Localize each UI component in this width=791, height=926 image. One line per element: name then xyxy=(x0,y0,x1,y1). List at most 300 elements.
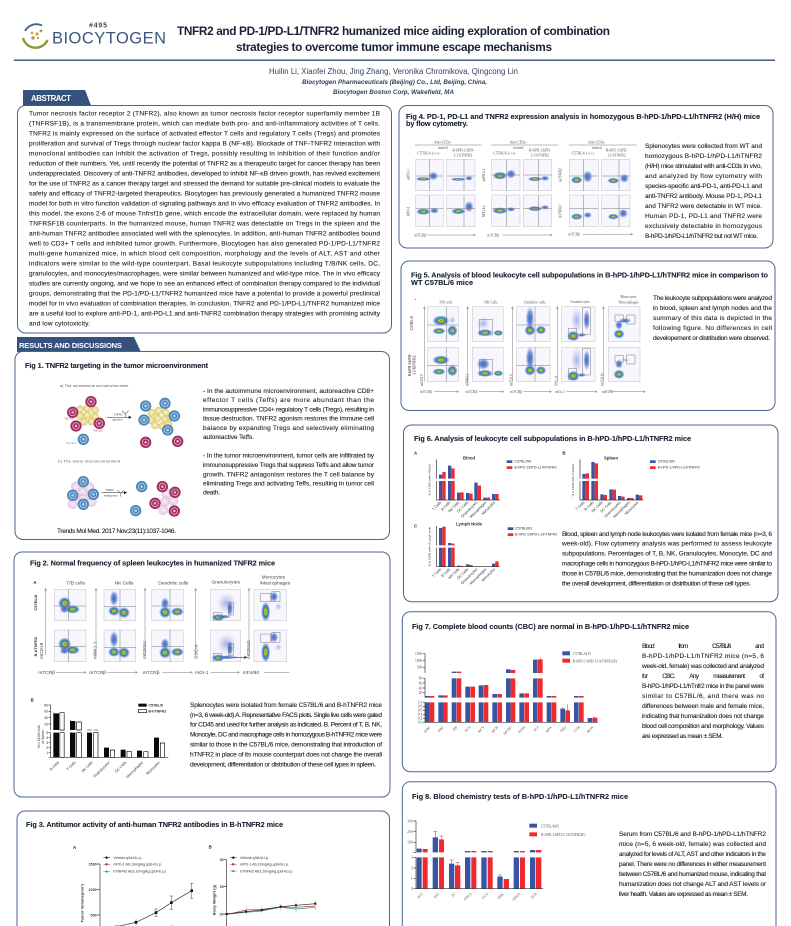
text block: Fig 1 description: immunosuppressive CD4+ regulatory T cells (Tregs), resulting in xyxy=(203,406,374,413)
flow cytometry plots A: SSC-A xyxy=(193,643,199,659)
bar chart C: lymph node: DC Cells xyxy=(456,567,469,580)
bar chart: complete blood counts: B-hPD-1/hPD-L1/hTNFR2(F) xyxy=(573,659,618,663)
bar chart: complete blood counts: MON xyxy=(586,725,595,734)
text block: Fig 6 description: macrophage cells in homozygous B-hPD-1/hPD-L1/hTNFR2 mice were similar to xyxy=(562,561,772,568)
panel: abstract: reduction of their numbers. Yet, until recently the potential of TNFR2 as a therapeutic target for cancer therapy has been xyxy=(29,160,380,168)
bar chart: complete blood counts: PLT xyxy=(533,725,541,732)
bar chart B: spleen: C57BL/6N xyxy=(658,460,675,464)
bar chart A: blood: B Cells xyxy=(440,500,451,512)
flow cytometry plots: SSC-A xyxy=(554,375,558,386)
line chart B: body weight: mPD-1 Ab,10mg/kg,q3d×6,i.p. xyxy=(240,863,289,867)
bar chart: blood chemistry: TBIL xyxy=(496,891,506,900)
text block: Fig 6 description: those in C57BL/6 mice, demonstrating that the humanization does not change xyxy=(562,571,772,578)
flow cytometry plots: Granulocytes xyxy=(570,300,590,304)
flow cytometry plots: T/B cells xyxy=(439,301,453,305)
bar chart A: blood: B-hPD-1/hPD-L1/hTNFR2 xyxy=(514,466,557,470)
flow cytometry plots: mTCRβ xyxy=(568,233,580,237)
flow cytometry plots: treated xyxy=(592,146,602,150)
text block: Fig 2 description: for CD45 and used for further analysis as indicated. B. Percent of T, B, NK, xyxy=(190,721,382,728)
flow cytometry plots A: /Macrophages xyxy=(260,580,291,586)
bar chart: complete blood counts: 0.6 xyxy=(418,709,422,713)
bar chart: blood chemistry: ALB xyxy=(530,891,538,900)
bar chart A: blood: C57BL/6N xyxy=(514,460,532,464)
bar chart C: lymph node xyxy=(414,522,557,586)
icon: Biocytogen logo xyxy=(23,24,166,48)
panel: abstract: (TNFRSF1B), is a transmembrane protein, which can mediate both pro- and anti-inflammatory activities of T cells. xyxy=(29,120,380,128)
bar chart C: lymph node: B Cells xyxy=(440,567,451,578)
bar chart B: spleen xyxy=(562,450,700,519)
bar chart C: lymph node: Monocytes xyxy=(481,567,496,583)
flow cytometry plots: C57BL/6 (+/+) xyxy=(572,151,594,155)
authors and affiliations xyxy=(269,67,518,96)
flow cytometry plots: Anti-CD3ε- xyxy=(510,141,528,145)
bar chart: blood chemistry: TC xyxy=(451,891,457,898)
panel: abstract: groups, demonstrating that the PD-1/PD-L1/TNFR2 humanized mice have a potential to provide a powerful preclinical xyxy=(29,290,381,298)
flow cytometry plots: mTCRβ xyxy=(510,390,522,394)
panel: abstract: model for in vivo evaluation of combination therapies. In conclusion, TNFR2 and PD-1/PD-L1/TNFR2 humanized mice xyxy=(29,300,380,308)
title xyxy=(177,24,610,54)
text block: Fig 1 description: immunosuppressive Tregs that suppress Teffs and allow tumor xyxy=(203,462,375,469)
line chart A: tumor volume: Tumor Volume(mm³) xyxy=(79,883,84,923)
flow cytometry plots: B-hPD-1/hPD- xyxy=(606,148,628,152)
text block: Fig 1 description xyxy=(203,388,375,497)
bar chart A: blood: % in CD45 cells of Blood xyxy=(428,464,432,496)
panel: Fig 7 xyxy=(402,612,776,772)
flow cytometry plots A: Dendritic cells xyxy=(158,580,189,586)
flow cytometry plots: mTCRβ xyxy=(414,233,426,237)
bar chart: blood chemistry: UREA xyxy=(512,892,522,902)
bar chart C: lymph node: NK Cells xyxy=(447,567,460,580)
flow cytometry plots A: mF4/80 xyxy=(243,670,259,676)
bar chart: complete blood counts: 1500 xyxy=(415,652,423,656)
text block: Fig 4 description: homozygous B-hPD-1/hPD-L1/hTNFR2 xyxy=(645,153,762,160)
bar chart: blood chemistry xyxy=(407,819,586,902)
line chart B: body weight: 20 xyxy=(220,912,224,916)
flow cytometry plots: Anti-CD3ε- xyxy=(588,141,606,145)
title: TNFR2 and PD-1/PD-L1/TNFR2 humanized mice aiding exploration of combination xyxy=(177,24,610,38)
bar chart B: Monocytes xyxy=(145,760,161,776)
flow cytometry plots: mPD-L1 xyxy=(482,168,486,181)
line chart A: tumor volume: mPD-1 Ab,10mg/kg,q3d×6,i.p. xyxy=(113,863,162,867)
bar chart: complete blood counts: 80 xyxy=(419,677,423,681)
flow cytometry plots: mF4/80 xyxy=(602,390,614,394)
bar chart B: spleen: DC Cells xyxy=(600,500,613,514)
text block: Fig 2 description: development, differentiation or distribution of these cell types in spleen. xyxy=(190,762,376,769)
panel: abstract: monoclonal antibodies can inhibit the activation of Tregs, possibly resulting in inhibition of their function and/or xyxy=(29,150,381,158)
text block: Fig 5 description: summary of this data is depicted in the xyxy=(653,315,772,322)
text block: Fig 1 description: tissue destruction. TNFR2 agonism restores the immune cell xyxy=(203,416,375,423)
panel: Fig 5: WT C57BL/6 mice xyxy=(411,278,473,287)
diagram: autoimmune and tumor microenvironments: TNFR2 xyxy=(105,488,114,492)
flow cytometry plots: /Macrophages xyxy=(618,301,639,305)
text block: Fig 5 description: following figure. No differences in cell xyxy=(653,325,773,332)
bar chart: complete blood counts: 1000 xyxy=(415,659,423,663)
panel: Fig 3: Fig 3. Antitumor activity of anti-human TNFR2 antibodies in B-hTNFR2 mice xyxy=(26,820,283,829)
text block: Fig 1 description: balance by expanding Tregs and selectively eliminating xyxy=(203,425,374,432)
text block: Fig 4 description: (H/H) mice stimulated with anti-CD3ε in vivo, xyxy=(645,163,762,170)
bar chart B: B xyxy=(31,698,34,703)
flow cytometry plots A xyxy=(33,574,291,676)
text block: Fig 6 description: subpopulations. Percentages of T, B, NK, Granulocytes, Monocyte, DC and xyxy=(562,551,772,558)
bar chart: complete blood counts: 1.0 xyxy=(418,701,422,705)
line chart A: tumor volume: 1500 xyxy=(89,862,97,866)
bar chart B xyxy=(31,698,168,779)
bar chart: blood chemistry: 0 xyxy=(411,887,413,891)
bar chart B: 20 xyxy=(44,722,48,726)
bar chart B: 2 xyxy=(46,746,48,750)
panel: Fig 1: Fig 1. TNFR2 targeting in the tumor microenvironment xyxy=(25,361,209,370)
diagram: autoimmune and tumor microenvironments: TNFR2 xyxy=(114,413,123,417)
panel: abstract: this model, the exons 2-6 of mouse Tnfrsf1b gene, which encode the extracellular domain, were replaced by human xyxy=(29,210,380,218)
diagram: autoimmune and tumor microenvironments: Treg CD4 xyxy=(66,442,76,445)
bar chart B: Macrophages xyxy=(126,760,144,779)
text block: Fig 2 description: hTNFR2 in place of its mouse counterpart does not change the overall xyxy=(190,752,383,759)
panel: abstract: model for both in vitro function validation of signaling pathways and in vivo efficacy evaluation of TNFR2 antibodies. In xyxy=(29,200,380,208)
flow cytometry plots: treated xyxy=(513,146,523,150)
bar chart: complete blood counts: MCV xyxy=(477,725,486,734)
flow cytometry plots: hTNFR2 xyxy=(558,204,562,218)
bar chart: complete blood counts: 0.2 xyxy=(418,717,422,721)
bar chart B: T Cells xyxy=(66,760,77,771)
diagram: autoimmune and tumor microenvironments: Teff CD8 xyxy=(93,430,103,432)
text block: Fig 7 description: blood cell composition and morphology. Values xyxy=(642,723,765,730)
text block: Fig 1 description: eliminating Tregs and activating Teffs, resulting in tumor cell xyxy=(203,481,375,488)
text block: Fig 7 description: similar to C57BL/6, and there was no xyxy=(642,693,764,700)
text block: Fig 5 description: developement or distribution were observed. xyxy=(653,335,770,342)
text block: Fig 7 description: for CBC. Any measurement of xyxy=(642,673,764,680)
bar chart: complete blood counts: RDW xyxy=(518,725,527,734)
flow cytometry plots A: A xyxy=(33,580,37,585)
diagram: autoimmune and tumor microenvironments xyxy=(58,384,183,517)
line chart B: body weight xyxy=(209,844,316,926)
poster number: #495 xyxy=(89,22,107,30)
text block: Fig 6 description xyxy=(561,531,772,588)
bar chart A: blood: DC Cells xyxy=(456,500,469,514)
panel: Fig 2 xyxy=(14,552,390,797)
line chart B: body weight: 30 xyxy=(220,858,224,862)
text block: Fig 4 description: Human PD-1, PD-L1 and TNFR2 were xyxy=(645,213,762,220)
flow cytometry plots A: mCD11c xyxy=(142,640,148,659)
panel: abstract: for the use of TNFR2 as a cancer therapy target and stressed the demand for suitable pre-clinical models to evaluate the xyxy=(29,180,380,188)
flow cytometry plots: hPD-1 xyxy=(407,206,411,216)
bar chart: complete blood counts: 0.0 xyxy=(418,721,422,725)
bar chart B: spleen: Macrophages xyxy=(612,500,631,519)
line chart B: body weight: hTNFR2 Ab3,10mg/kg,q3d×6,i.p. xyxy=(240,869,293,873)
bar chart: complete blood counts: MPV xyxy=(545,725,554,734)
flow cytometry plots xyxy=(408,295,645,394)
line chart B: body weight: Body Weight (g) xyxy=(212,884,217,915)
bar chart C: lymph node: Lymph Node xyxy=(456,522,483,527)
flow cytometry plots A: mCD19 xyxy=(39,642,45,659)
bar chart B: 3 xyxy=(46,741,48,745)
panel: abstract: TNFRSF1B counterparts. In the humanized mouse, human TNFR2 was detectable on Tregs in the spleen and the xyxy=(29,220,380,228)
bar chart: complete blood counts: 20 xyxy=(419,691,423,695)
bar chart: complete blood counts: 500 xyxy=(417,666,423,670)
text block: Fig 7 description: B-hPD-1/hPD-L1/hTNFR2 mice (n=5, 6 xyxy=(642,653,764,660)
panel: Fig 2: Fig 2. Normal frequency of spleen leukocytes in humanized TNFR2 mice xyxy=(30,559,275,568)
bar chart: blood chemistry: 1 xyxy=(411,877,413,881)
text block: Fig 1 description: - In the tumor microenvironment, tumor cells are infiltrated by xyxy=(203,453,375,460)
bar chart A: blood: Granulocytes xyxy=(460,500,478,519)
flow cytometry plots A: Granulocytes xyxy=(211,579,240,585)
panel: abstract: safety and efficacy of TNFR2-targeted therapeutics. Biocytogen has previously generated a humanized TNFR2 mouse xyxy=(29,190,380,198)
flow cytometry plots A: mTCRβ xyxy=(89,670,106,676)
text block: Fig 8 description: between C57BL/6 and humanized mouse, indicating that xyxy=(619,871,766,878)
text block: Fig 4 description: and TNFR2 were detectable in WT mice. xyxy=(645,203,762,210)
bar chart B: spleen: % in CD45 cells of Spleen xyxy=(571,463,575,496)
flow cytometry plots A: mGr-1 xyxy=(195,670,209,676)
authors and affiliations: Huilin Li, Xiaofei Zhou, Jing Zhang, Veronika Chromikova, Qingcong Lin xyxy=(269,67,518,76)
bar chart A: blood: Blood xyxy=(463,455,475,460)
bar chart B: NK Cells xyxy=(81,760,94,773)
line chart B: body weight: B xyxy=(209,844,212,849)
flow cytometry plots: mCD11c xyxy=(509,373,513,386)
diagram: autoimmune and tumor microenvironments: agonism xyxy=(112,418,123,422)
bar chart: complete blood counts: WBC xyxy=(423,725,432,734)
flow cytometry plots A: C57BL/6 xyxy=(33,594,38,611)
panel: abstract: studies are currently ongoing, and we hope to see an enhanced effect of combination therapy compared to the individual xyxy=(29,280,381,288)
text block: Fig 6 description: Blood, spleen and lymph node leukocytes were isolated from female mice (n=3, 6 xyxy=(562,531,772,538)
line chart A: tumor volume: 1000 xyxy=(89,888,97,892)
flow cytometry plots: mNK1.1 xyxy=(465,373,469,386)
panel: abstract: proliferation and survival of Tregs through nuclear factor kappa B (NF-κB). Blockade of TNF-TNFR2 interaction with xyxy=(29,140,380,148)
bar chart A: blood: T Cells xyxy=(432,500,442,511)
flow cytometry plots: mGr-1 xyxy=(555,390,565,394)
panel: Fig 5 xyxy=(401,261,775,410)
authors and affiliations: Biocytogen Boston Corp, Wakefield, MA xyxy=(333,89,454,96)
flow cytometry plots xyxy=(407,141,637,237)
flow cytometry plots: C57BL/6 (+/+) xyxy=(493,151,516,155)
flow cytometry plots: Anti-CD3ε- xyxy=(434,141,452,145)
bar chart: complete blood counts: 40 xyxy=(419,686,423,690)
text block: Fig 7 description: indicating that humanization does not change xyxy=(642,713,764,720)
text block: Fig 8 description: panel. There were no differences in either measurement xyxy=(619,861,766,868)
bar chart B: spleen: NK Cells xyxy=(591,500,604,513)
text block: Fig 1 description: death. xyxy=(203,490,220,497)
text block: Fig 2 description xyxy=(190,702,383,769)
heading: results and discussions xyxy=(17,337,141,352)
bar chart B: DC Cells xyxy=(114,760,127,774)
text block: Fig 4 description xyxy=(645,143,763,240)
text block: Fig 7 description: are expressed as mean ± SEM. xyxy=(642,733,723,740)
bar chart C: lymph node: T Cells xyxy=(432,567,442,578)
bar chart: complete blood counts: 0.4 xyxy=(418,713,422,717)
bar chart B: % in CD45 cells xyxy=(37,725,41,748)
text block: Fig 4 description: and analyzed by flow cytometry with xyxy=(645,173,762,180)
flow cytometry plots: L1/hTNFR2 xyxy=(608,154,626,158)
bar chart B: spleen: B Cells xyxy=(584,500,595,512)
text block: Fig 7 description: B-hPD-1/hPD-L1/hTnfr2 mice in the panel were xyxy=(642,683,764,690)
diagram: autoimmune and tumor microenvironments: b) The tumor microenvironment xyxy=(58,459,120,463)
bar chart: blood chemistry: 100 xyxy=(407,841,413,845)
bar chart: complete blood counts: HCT xyxy=(464,725,473,733)
line chart A: tumor volume: A xyxy=(73,845,77,850)
bar chart C: lymph node: C xyxy=(414,524,417,529)
panel: Fig 8: Fig 8. Blood chemistry tests of B-hPD-1/hPD-L1/hTNFR2 mice xyxy=(412,792,628,801)
text block: Fig 6 description: week-old). Flow cytometry analysis was performed to assess leukocyte xyxy=(561,541,772,548)
bar chart: complete blood counts: HB xyxy=(452,725,459,732)
flow cytometry plots: C57BL/6 xyxy=(410,316,414,330)
bar chart C: lymph node: C57BL/6N xyxy=(515,527,532,531)
text block: Fig 1 description: autoreactive Teffs. xyxy=(203,434,254,441)
bar chart: complete blood counts xyxy=(415,651,618,736)
text block: Fig 8 description: mice (n=5, 6 week-old, female) was collected and xyxy=(619,841,766,848)
text block: Fig 5 description xyxy=(653,295,773,342)
flow cytometry plots A: mNK1.1 xyxy=(93,641,99,659)
bar chart: blood chemistry: ALT xyxy=(416,891,425,900)
flow cytometry plots: L1/hTNFR2 xyxy=(413,355,417,375)
flow cytometry plots: B-hPD-1/hPD- xyxy=(529,148,552,152)
bar chart C: lymph node: Macrophages xyxy=(469,567,487,586)
flow cytometry plots: hPD-L1 xyxy=(482,205,486,217)
flow cytometry plots: mTCRβ xyxy=(420,390,432,394)
bar chart: blood chemistry: 2 xyxy=(411,866,413,870)
text block: Fig 1 description: effector T cells (Teffs) are more abundant than the xyxy=(203,397,374,404)
panel: abstract: anti-human TNFR2 antibodies associated well with the splenocytes. In addition, anti-human TNFR2 antibodies bound xyxy=(29,230,380,238)
bar chart: complete blood counts: MCH xyxy=(491,725,500,734)
line chart A: tumor volume: hTNFR2 Ab3,10mg/kg,q3d×6,i.p. xyxy=(113,870,167,874)
citation: Trends Mol Med. 2017 Nov;23(11):1037-1046. xyxy=(57,528,176,535)
flow cytometry plots: mCD11b xyxy=(600,373,604,386)
flow cytometry plots A: mCD11b xyxy=(246,640,252,659)
panel: Fig 3 xyxy=(17,811,390,926)
bar chart: blood chemistry: AST xyxy=(433,891,441,900)
bar chart: complete blood counts: 0.8 xyxy=(418,705,422,709)
text block: Fig 5 description: in blood, spleen and lymph nodes and the xyxy=(653,305,772,312)
bar chart B: C57BL/6 xyxy=(148,703,163,707)
bar chart A: blood: A xyxy=(414,450,418,455)
text block: Fig 8 description: liver health. Values are expressed as mean ± SEM. xyxy=(619,891,748,898)
text block: Fig 8 description: humanization does not change ALT and AST levels or xyxy=(619,881,767,888)
flow cytometry plots: C57BL/6 (+/+) xyxy=(417,151,440,155)
text block: Fig 7 description: Blood from C57BL/6 and xyxy=(642,643,764,650)
text block: Fig 8 description xyxy=(619,831,767,898)
bar chart: blood chemistry: B-hPD-1/hPD-L1/hTNFR2(F) xyxy=(541,833,586,837)
flow cytometry plots: treated xyxy=(438,146,448,150)
flow cytometry plots: mTCRβ xyxy=(487,233,499,237)
bar chart B: spleen: Monocytes xyxy=(624,500,639,516)
flow cytometry plots: mPD-1 xyxy=(407,169,411,180)
bar chart: blood chemistry: 200 xyxy=(407,830,413,834)
text block: Fig 8 description: analyzed for levels of ALT, AST and other indicators in the xyxy=(619,851,766,858)
bar chart C: lymph node: Granulocytes xyxy=(460,567,478,585)
flow cytometry plots A: B-hTNFR2 xyxy=(33,636,38,656)
bar chart: blood chemistry: CREA xyxy=(463,892,473,902)
bar chart: complete blood counts: 60 xyxy=(419,681,423,685)
bar chart B: of Spleen xyxy=(41,729,45,744)
panel: abstract xyxy=(18,90,392,333)
bar chart A: blood xyxy=(414,450,557,519)
bar chart B: B-hTNFR2 xyxy=(148,709,166,713)
flow cytometry plots: Monocytes xyxy=(620,295,637,299)
flow cytometry plots: B-hPD-1/hPD- xyxy=(408,353,412,376)
bar chart: blood chemistry: 300 xyxy=(407,819,413,823)
bar chart: blood chemistry: GLU xyxy=(481,892,489,900)
bar chart B: spleen: Granulocytes xyxy=(604,500,622,519)
bar chart B: Granulocytes xyxy=(93,760,111,779)
bar chart C: lymph node: % in CD45 cells of Lymph node xyxy=(428,527,432,566)
text block: Fig 4 description: species-specific anti-PD-1, anti-PD-L1 and xyxy=(645,183,762,190)
panel: abstract: are a useful tool to explore anti-PD-1, anti-PD-L1 and anti-TNFR2 combination therapy strategies with promising activity xyxy=(29,310,381,318)
flow cytometry plots A: NK Cells xyxy=(115,580,134,586)
text block: Fig 4 description: exclusively detectable in homozygous xyxy=(645,223,763,230)
bar chart: complete blood counts: C57BL/6(F) xyxy=(573,652,592,656)
bar chart C: lymph node: B-hPD-1/hPD-L1/hTNFR2 xyxy=(515,533,557,537)
text block: Fig 4 description: anti-TNFR2 antibody. Mouse PD-1, PD-L1 xyxy=(645,193,762,200)
text block: Fig 7 description xyxy=(641,643,765,740)
panel: Fig 6: Fig 6. Analysis of leukocyte cell subpopulations in B-hPD-1/hPD-L1/hTNFR2 mice xyxy=(414,434,691,443)
flow cytometry plots: mTNFR2 xyxy=(558,168,562,182)
heading: results and discussions: RESULTS AND DISCUSSIONS xyxy=(19,341,122,350)
panel: abstract: indicators were similar to the wild-type counterpart. Basal leukocyte subpopulations including T/B/NK cells, DC, xyxy=(29,260,380,268)
text block: Fig 7 description: week-old, female) was collected and analyzed xyxy=(641,663,764,670)
text block: Fig 4 description: B-hPD-1/hPD-L1/hTNFR2 but not WT mice. xyxy=(645,233,758,240)
text block: Fig 1 description: - In the autoimmune microenvironment, autoreactive CD8+ xyxy=(203,388,374,395)
flow cytometry plots A: mTCRβ xyxy=(143,670,160,676)
panel: abstract: granulocytes, and monocytes/macrophages, were similar between humanized and wild-type mice. The in vivo efficacy xyxy=(29,270,381,278)
bar chart B: spleen: Spleen xyxy=(604,455,618,460)
line chart A: tumor volume xyxy=(73,845,193,926)
flow cytometry plots A: mTCRβ xyxy=(38,670,55,676)
bar chart B: spleen: B-hPD-1/hPD-L1/hTNFR2 xyxy=(658,466,700,470)
panel: abstract: well to CD3+ T cells and inhibited tumor growth. Furthermore, Biocytogen has also generated PD-1/PD-L1/TNFR2 xyxy=(28,240,380,248)
line chart A: tumor volume: Vehicle,q3d×6,i.p. xyxy=(113,856,142,860)
panel: Fig 4: Fig 4. PD-1, PD-L1 and TNFR2 expression analysis in homozygous B-hPD-1/hPD-L1/hTNFR2 (H/H) mice xyxy=(406,112,760,121)
line chart A: tumor volume: 500 xyxy=(91,913,97,917)
bar chart B: 5 xyxy=(46,731,48,735)
icon: Biocytogen logo: BIOCYTOGEN xyxy=(52,30,166,48)
text block: Fig 7 description: differences between male and female mice, xyxy=(642,703,764,710)
diagram: autoimmune and tumor microenvironments: Teff CD8 xyxy=(64,418,74,420)
flow cytometry plots: mTCRβ xyxy=(466,390,478,394)
bar chart: blood chemistry: C57BL/6(F) xyxy=(541,824,560,828)
panel: Fig 5: Fig 5. Analysis of blood leukocyte cell subpopulations in B-hPD-1/hPD-L1/hTNFR2 mice in comparison to xyxy=(411,270,769,279)
bar chart: blood chemistry: 3 xyxy=(411,856,413,860)
panel: abstract: ABSTRACT xyxy=(31,94,71,103)
text block: Fig 6 description: the overall development, differentiation or distribution of these cell types. xyxy=(562,581,751,588)
title: strategies to overcome tumor immune escape mechanisms xyxy=(236,40,552,54)
panel: abstract: multi-gene humanized mice, in which blood cell composition, morphology and the levels of ALT, AST and other xyxy=(29,250,381,258)
flow cytometry plots: B-hPD-1/hPD- xyxy=(452,148,475,152)
panel: Fig 7: Fig 7. Complete blood counts (CBC) are normal in B-hPD-1/hPD-L1/hTNFR2 mice xyxy=(412,622,689,631)
bar chart A: blood: Monocytes xyxy=(481,500,496,516)
bar chart: complete blood counts: RBC xyxy=(437,725,445,733)
bar chart: complete blood counts: LYM xyxy=(573,725,582,734)
flow cytometry plots A: T/B cells xyxy=(66,580,86,586)
text block: Fig 5 description: The leukocyte subpopulations were analyzed xyxy=(653,295,772,302)
flow cytometry plots: Dendritic cells xyxy=(524,301,546,305)
flow cytometry plots: NK Cells xyxy=(484,301,498,305)
panel: Fig 8 xyxy=(402,782,776,926)
bar chart B: 80 xyxy=(44,703,48,707)
panel: abstract: underappreciated. Discovery of anti-TNFR2 antibodies, developed to inhibit NF-κB driven growth, has revived excitement xyxy=(29,170,380,178)
text block: Fig 4 description: Splenocytes were collected from WT and xyxy=(645,143,762,150)
flow cytometry plots: L1/hTNFR2 xyxy=(531,154,549,158)
panel: abstract: TNFR2 is mainly expressed on the surface of activated effector T cells and regulatory T cells (Tregs) and promotes xyxy=(29,130,381,138)
text block: Fig 2 description: similar to those in the C57BL/6 mice, demonstrating that introduction of xyxy=(190,742,382,749)
text block: Fig 2 description: (n=3, 6 week-old) A. Representative FACS plots. Single live cells were gated xyxy=(190,712,382,719)
bar chart A: blood: Macrophages xyxy=(469,500,487,519)
authors and affiliations: Biocytogen Pharmaceuticals (Beijing) Co., Ltd, Beijing, China, xyxy=(302,79,487,86)
panel: Fig 6 xyxy=(404,425,778,602)
diagram: autoimmune and tumor microenvironments: antagonism xyxy=(104,494,119,498)
diagram: autoimmune and tumor microenvironments: a) The autoimmune microenvironment xyxy=(60,384,128,388)
bar chart B: spleen: B xyxy=(562,450,565,455)
bar chart B: 1 xyxy=(46,751,48,755)
panel: Fig 4 xyxy=(399,106,773,248)
bar chart: complete blood counts: NEU xyxy=(559,725,568,733)
panel: Fig 4: by flow cytometry. xyxy=(406,119,468,128)
